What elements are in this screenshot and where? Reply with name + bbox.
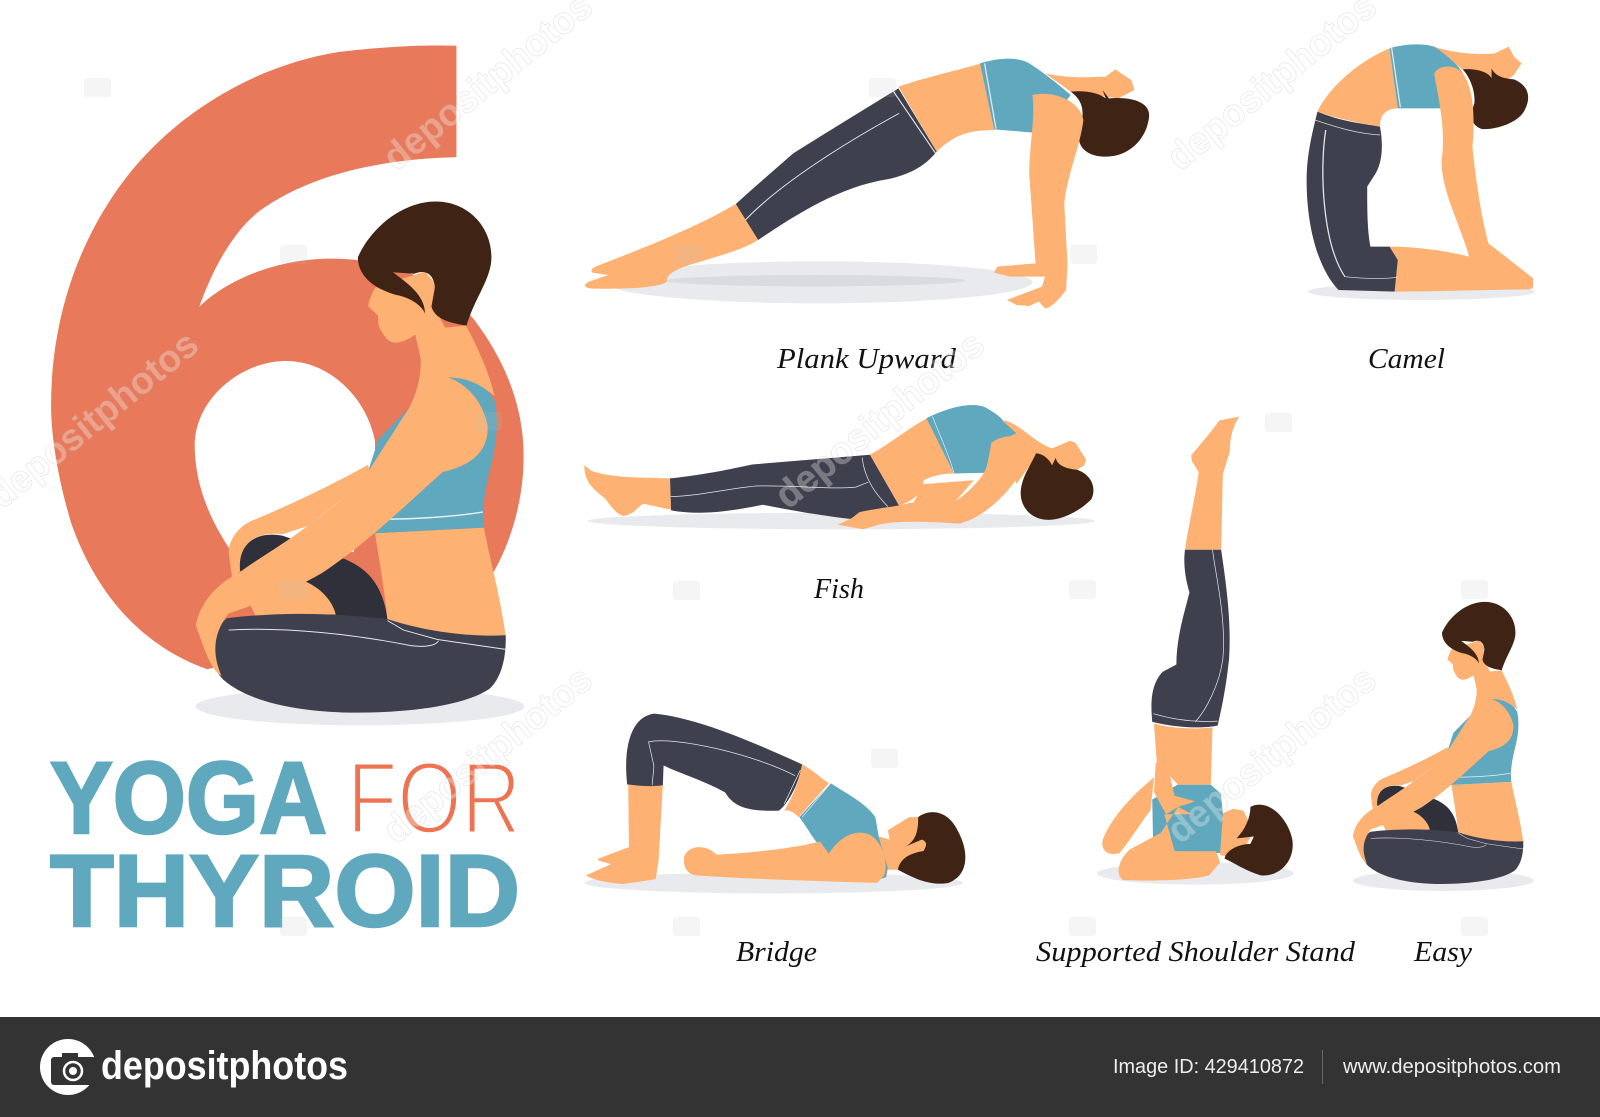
icon: camera logo bbox=[40, 1039, 96, 1095]
watermarks: depositphotos bbox=[375, 658, 601, 852]
pose labels: Plank Upward bbox=[776, 344, 957, 375]
pose labels: Supported Shoulder Stand bbox=[1036, 937, 1356, 968]
image id: Image ID: 429410872 bbox=[1113, 1056, 1304, 1078]
title: YOGA bbox=[50, 741, 327, 855]
title bbox=[50, 741, 521, 948]
pose labels: Easy bbox=[1413, 937, 1473, 968]
title: THYROID bbox=[50, 834, 520, 948]
pose labels: Camel bbox=[1368, 344, 1445, 375]
figure: camel pose bbox=[1307, 44, 1535, 300]
logo wordmark: depositphotos bbox=[101, 1044, 348, 1088]
large number 6 bbox=[51, 45, 524, 669]
watermarks: depositphotos bbox=[767, 323, 993, 517]
pose labels: Fish bbox=[813, 574, 864, 605]
figure: plank upward pose bbox=[585, 59, 1149, 308]
watermarks: depositphotos bbox=[1159, 658, 1385, 852]
footer bar bbox=[0, 1017, 1600, 1117]
figure: small easy pose bbox=[1353, 602, 1534, 891]
figure: fish pose bbox=[584, 405, 1095, 529]
figure: large easy pose bbox=[196, 202, 524, 725]
pose labels bbox=[736, 344, 1473, 968]
pose labels: Bridge bbox=[736, 937, 817, 968]
title: FOR bbox=[347, 741, 521, 855]
watermarks bbox=[0, 0, 1488, 936]
website url: www.depositphotos.com bbox=[1342, 1056, 1561, 1078]
figure: bridge pose bbox=[584, 714, 965, 893]
figure: supported shoulder stand pose bbox=[1097, 417, 1293, 885]
